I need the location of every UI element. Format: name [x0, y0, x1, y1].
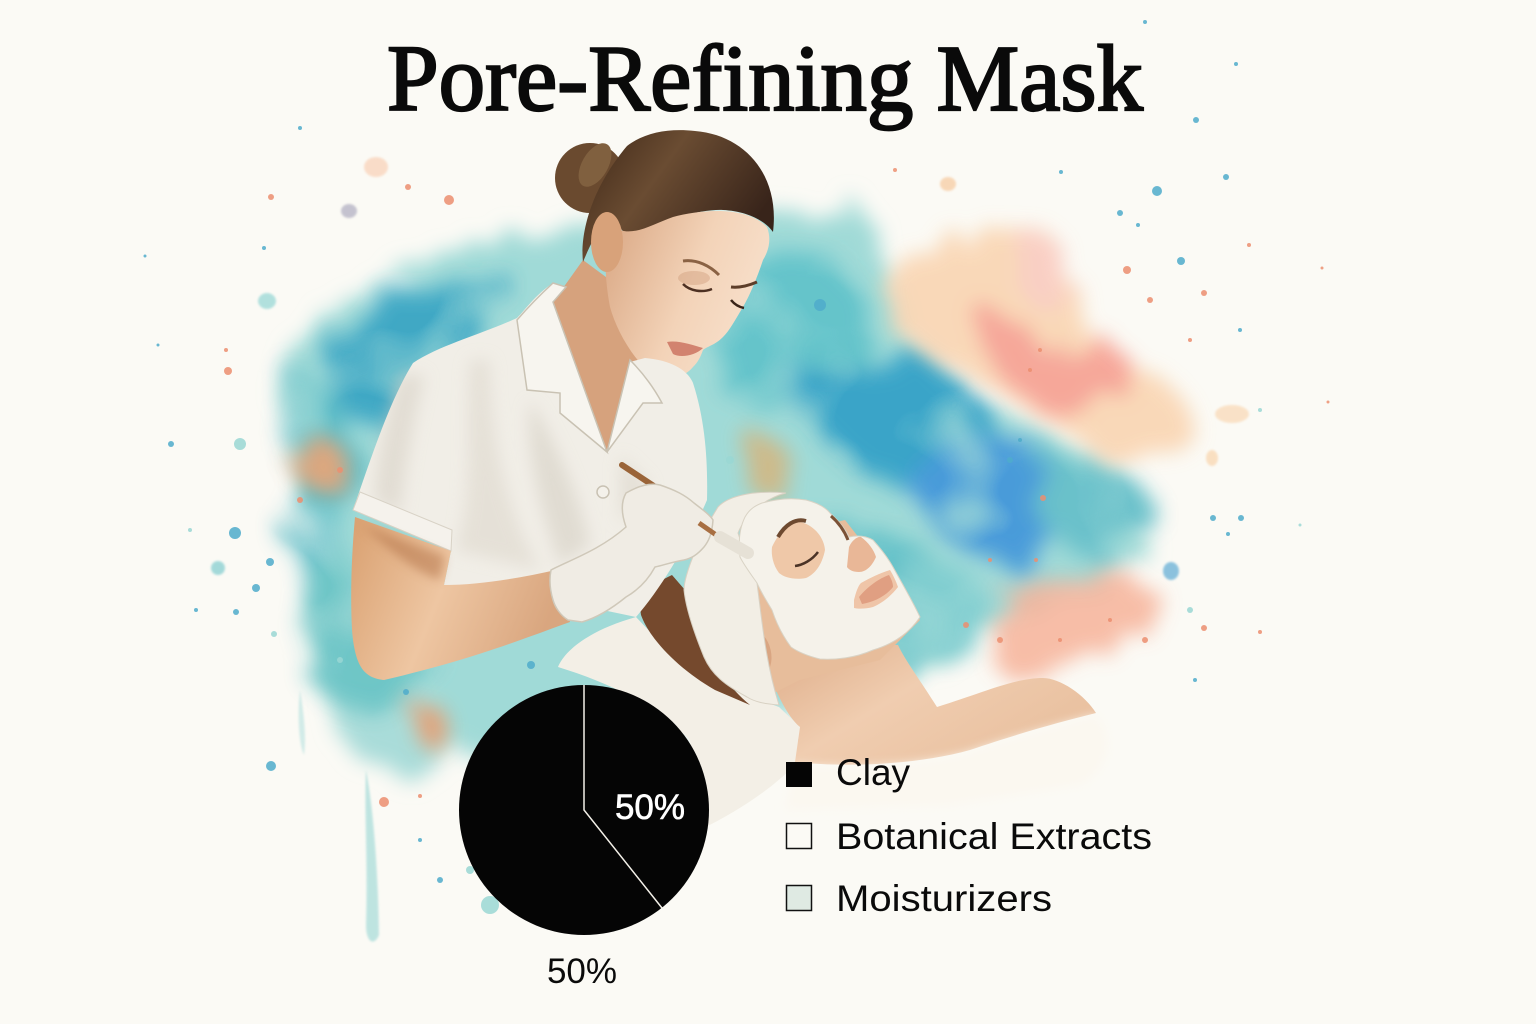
therapist collar	[517, 283, 662, 452]
watercolor background wash	[211, 157, 1249, 942]
therapist glove	[550, 484, 713, 622]
client closed eye	[795, 552, 818, 566]
therapist button	[597, 486, 609, 498]
client ear	[741, 629, 775, 677]
pie chart	[459, 685, 709, 935]
client neck and shoulders	[757, 640, 1096, 765]
client white towel wrap	[558, 617, 800, 830]
client lips area	[854, 570, 898, 609]
therapist arm	[351, 517, 570, 680]
client headband	[684, 492, 786, 705]
paint splatter dots	[144, 20, 1330, 914]
makeup brush tip	[699, 523, 748, 553]
title: Pore-Refining Mask	[387, 27, 1143, 131]
illustration: therapist	[351, 130, 774, 680]
therapist bun	[555, 138, 625, 213]
legend: moisturizers: Moisturizers	[836, 878, 1052, 919]
client clay mask	[739, 499, 920, 659]
pie label: inner: 50%	[615, 788, 685, 827]
client towel lower fade	[785, 715, 1107, 810]
therapist sleeve cuff	[353, 492, 452, 551]
therapist ear	[591, 212, 623, 272]
client hair	[641, 575, 750, 705]
therapist hair	[583, 130, 774, 262]
therapist lips	[667, 342, 703, 356]
makeup brush handle	[622, 465, 672, 498]
client lips	[859, 575, 893, 604]
legend: clay: Clay	[836, 752, 911, 793]
therapist uniform	[353, 283, 707, 617]
client nose	[847, 537, 876, 572]
client eye patch	[772, 522, 825, 579]
client brow right	[831, 516, 848, 540]
legend	[786, 752, 1152, 919]
legend: clay	[786, 752, 911, 793]
client head skin	[735, 520, 920, 695]
pie label: outer: 50%	[547, 952, 617, 991]
legend: botanical extracts: Botanical Extracts	[836, 816, 1152, 857]
client eyebrow	[778, 520, 806, 537]
therapist face	[605, 211, 769, 377]
therapist uniform shading	[375, 360, 650, 570]
illustration: client receiving facial	[558, 492, 1107, 830]
therapist eyes	[678, 261, 757, 308]
therapist arm shadow	[362, 525, 445, 580]
therapist neck	[553, 260, 660, 452]
